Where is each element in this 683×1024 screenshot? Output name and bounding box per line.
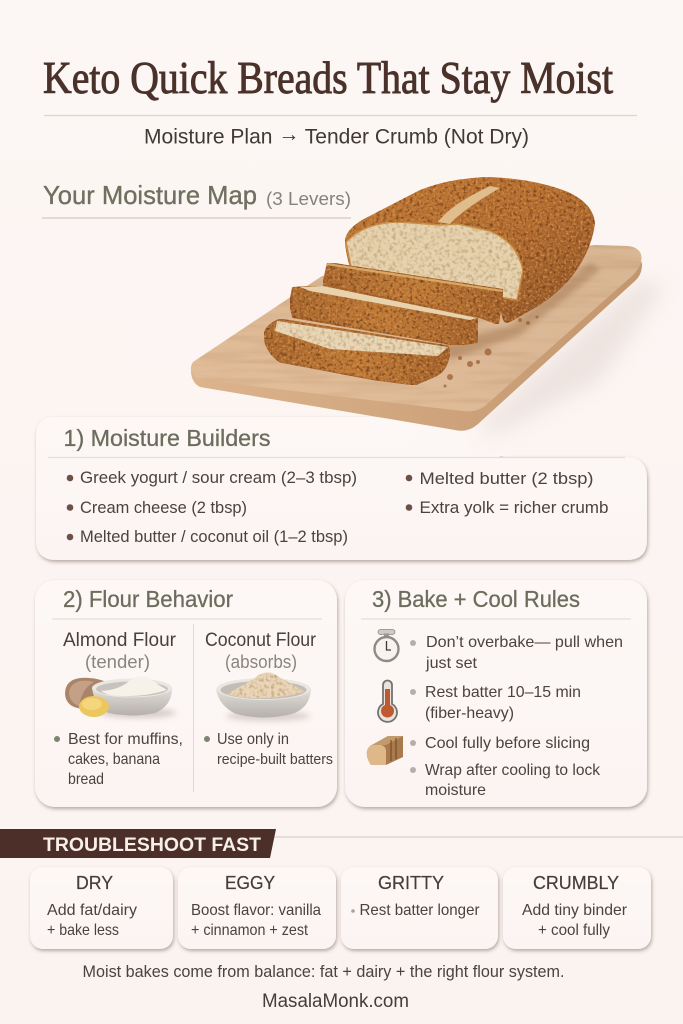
heading: flour behavior: 2) Flour Behavior [63, 586, 233, 612]
heading: bake + cool rules: 3) Bake + Cool Rules [372, 586, 580, 612]
banner: troubleshoot fast [0, 829, 276, 858]
column: almond flour [54, 630, 183, 788]
card: gritty [341, 867, 498, 949]
card: gritty: Rest batter longer [360, 902, 480, 919]
panel: bake + cool rules [345, 580, 647, 807]
card: dry: DRY [76, 873, 113, 893]
subtitle: → [278, 123, 299, 146]
card: crumbly: CRUMBLY [533, 873, 619, 893]
illustration: sliced loaf on wooden board [191, 177, 665, 436]
loaf crust [345, 177, 595, 323]
column: coconut flour: Use only in [217, 731, 289, 748]
section heading: moisture map: (3 Levers) [266, 189, 351, 209]
icon: stopwatch [374, 630, 398, 661]
card: gritty: GRITTY [378, 873, 444, 893]
card: crumbly: Add tiny binder [522, 902, 628, 919]
crumbs [444, 316, 538, 388]
card: eggy: Boost flavor: vanilla [191, 902, 321, 919]
title: Keto Quick Breads That Stay Moist [43, 53, 613, 103]
footer: website: MasalaMonk.com [262, 991, 409, 1012]
banner: troubleshoot fast: TROUBLESHOOT FAST [43, 835, 261, 856]
column: coconut flour [204, 630, 333, 768]
list: bake and cool rules [410, 634, 623, 799]
column: coconut flour: recipe-built batters [217, 751, 333, 768]
icon: almond flour bowl [65, 677, 176, 718]
list: moisture builders: Extra yolk = richer crumb [420, 498, 608, 517]
subtitle: Tender Crumb (Not Dry) [299, 126, 529, 148]
heading: moisture builders: 1) Moisture Builders [64, 425, 270, 451]
closing note: Moist bakes come from balance: fat + dairy + the right flour system. [82, 963, 564, 981]
column: almond flour: (tender) [85, 652, 150, 672]
panel: flour behavior [35, 580, 337, 807]
card: eggy [178, 867, 336, 949]
back slice [323, 263, 503, 324]
list: moisture builders [67, 468, 608, 546]
cutting board [191, 245, 642, 431]
panel: moisture builders [36, 408, 647, 560]
icon: thermometer [378, 680, 397, 722]
middle slice [290, 286, 478, 345]
card: dry [30, 867, 173, 949]
card: eggy: + cinnamon + zest [191, 922, 308, 939]
column: almond flour: cakes, banana [68, 751, 160, 768]
subtitle: Moisture Plan [144, 126, 272, 148]
icon: coconut flour bowl [216, 673, 311, 721]
list: bake and cool rules: moisture [425, 782, 486, 799]
card: eggy: EGGY [225, 873, 275, 893]
list: bake and cool rules: Don’t overbake— pull when [426, 634, 623, 651]
list: moisture builders: Melted butter / coconut oil (1–2 tbsp) [80, 527, 348, 546]
column: coconut flour: Coconut Flour [205, 630, 317, 651]
card: crumbly [503, 867, 651, 949]
column: almond flour: bread [68, 771, 104, 788]
card: dry: Add fat/dairy [47, 902, 137, 919]
column: almond flour: Best for muffins, [68, 731, 183, 748]
list: moisture builders: Melted butter (2 tbsp) [420, 469, 594, 488]
loaf top split [438, 186, 500, 224]
board shadow [480, 280, 665, 436]
icon: bread loaf [367, 736, 403, 765]
column: almond flour: Almond Flour [63, 630, 177, 651]
list: bake and cool rules: just set [425, 655, 478, 672]
list: bake and cool rules: Wrap after cooling to lock [425, 762, 601, 779]
list: bake and cool rules: Cool fully before slicing [425, 735, 590, 752]
list: bake and cool rules: (fiber-heavy) [425, 705, 514, 722]
section heading: moisture map: Your Moisture Map [43, 180, 257, 210]
card: dry: + bake less [47, 922, 119, 939]
card: crumbly: + cool fully [538, 922, 610, 939]
column: coconut flour: (absorbs) [225, 652, 297, 672]
loaf cut face [346, 222, 523, 300]
list: moisture builders: Greek yogurt / sour cream (2–3 tbsp) [80, 468, 357, 487]
front slice [264, 319, 450, 385]
loaf shadow on board [440, 262, 600, 360]
list: moisture builders: Cream cheese (2 tbsp) [80, 498, 247, 517]
list: bake and cool rules: Rest batter 10–15 min [425, 684, 581, 701]
